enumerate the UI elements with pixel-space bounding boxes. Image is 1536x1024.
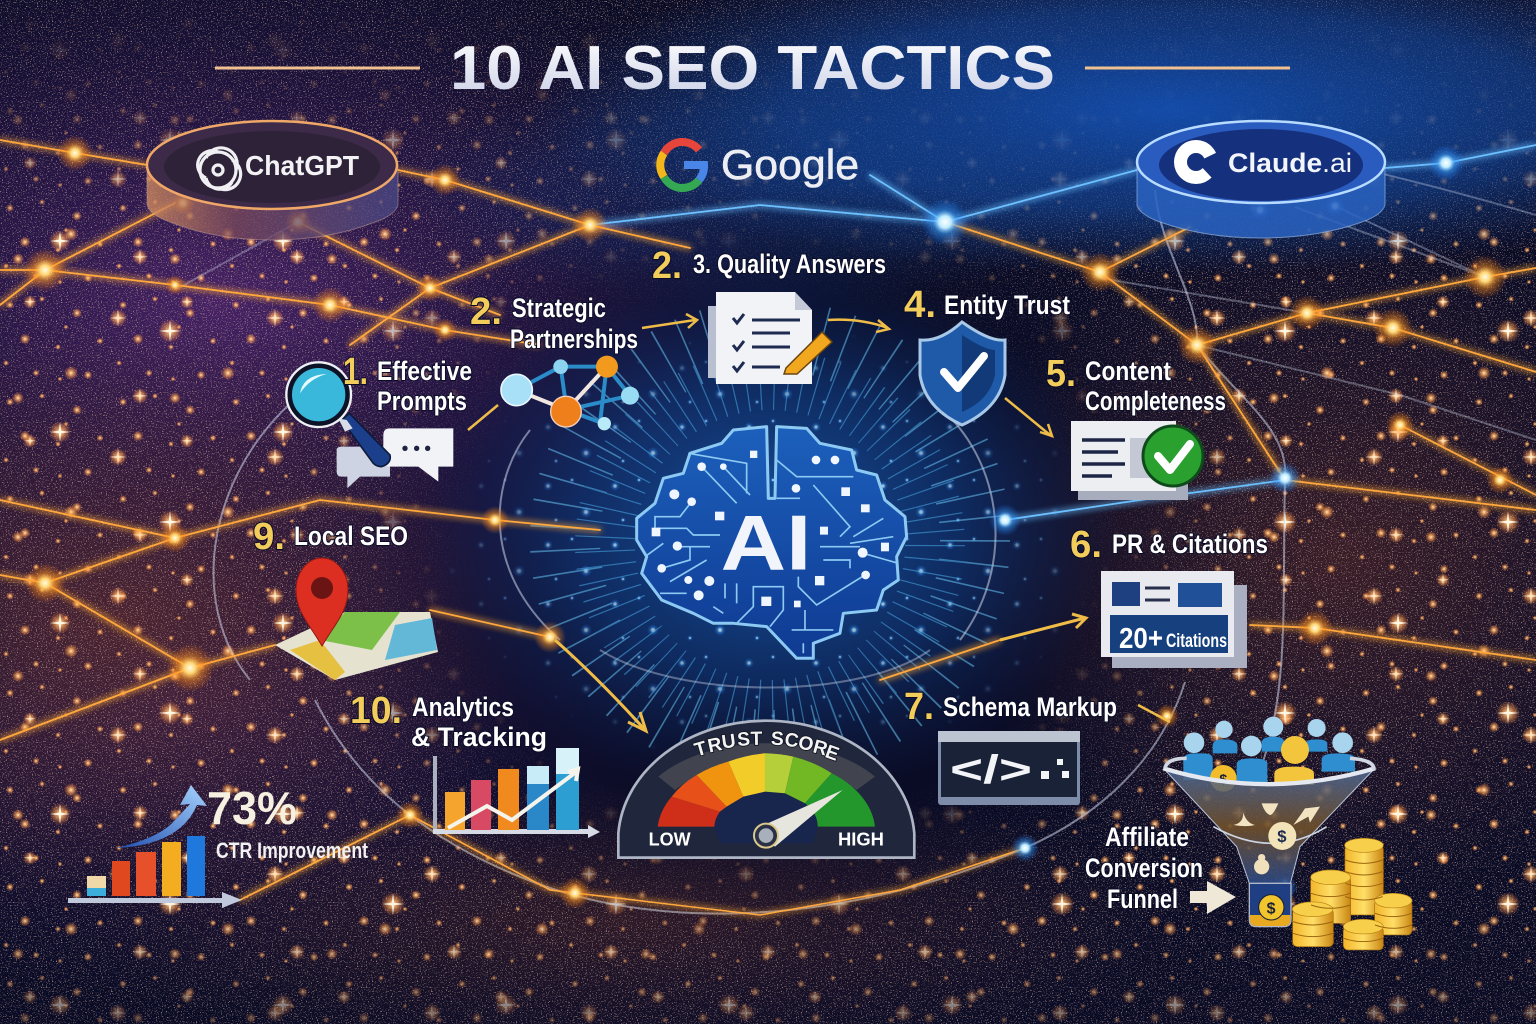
badge: ChatGPT	[147, 121, 398, 240]
tactic 10: Analytics and Tracking: Analytics	[412, 692, 514, 722]
tactic 2: Strategic Partnerships: 2.	[470, 291, 502, 333]
gauge labels: C	[783, 730, 800, 752]
icon: newspaper: 20+	[1119, 623, 1163, 655]
affiliate conversion funnel: Funnel	[1107, 884, 1178, 914]
bar chart and rising arrow	[68, 785, 242, 908]
circuit traces	[645, 453, 898, 653]
tactic 5: Content Completeness: 5.	[1046, 353, 1076, 395]
badge: Google	[660, 141, 859, 188]
badge: ChatGPT: ChatGPT	[245, 150, 359, 181]
affiliate conversion funnel	[1085, 717, 1412, 950]
tactic 9: Local SEO	[253, 516, 438, 680]
title: 10 AI SEO TACTICS	[450, 34, 1055, 103]
icon: map with pin	[275, 558, 438, 680]
stat: 73% CTR improvement: 73%	[207, 782, 297, 834]
gauge labels: S	[737, 729, 751, 751]
label: AI: AI	[721, 498, 811, 586]
affiliate conversion funnel: Conversion	[1085, 853, 1203, 883]
gauge needle	[754, 790, 843, 848]
tactic 3: Quality Answers: 3. Quality Answers	[693, 249, 886, 279]
tactic 2: Strategic Partnerships: Strategic	[512, 293, 606, 323]
tactic 4: Entity Trust: 4.	[904, 284, 936, 326]
badge: Google: Google	[721, 141, 859, 188]
icon: partner network	[501, 356, 639, 430]
tactic 5: Content Completeness	[1046, 353, 1226, 500]
badge: Claude.ai	[1137, 121, 1385, 238]
bar chart	[433, 748, 600, 838]
affiliate conversion funnel: Affiliate	[1105, 822, 1189, 852]
gauge labels: S	[770, 729, 784, 750]
central AI brain	[637, 427, 907, 658]
tactic 6: PR and Citations: PR & Citations	[1112, 529, 1268, 559]
tactic 9: Local SEO: 9.	[253, 516, 285, 558]
tactic 3: Quality Answers: 2.	[652, 245, 682, 287]
stat: 73% CTR improvement	[68, 782, 369, 908]
gauge labels: O	[796, 733, 815, 756]
rays around the brain	[565, 335, 975, 745]
conversion pouch	[1249, 883, 1291, 927]
tactic 10: Analytics and Tracking: 10.	[350, 690, 402, 732]
gauge labels: LOW	[649, 829, 691, 850]
icon: code window	[938, 731, 1080, 805]
tactic 6: PR and Citations	[1070, 524, 1268, 668]
icon: newspaper: Citations	[1166, 631, 1227, 652]
tactic 1: Effective Prompts: Prompts	[377, 386, 467, 416]
tactic 2: Strategic Partnerships: Partnerships	[510, 324, 638, 354]
tactic 4: Entity Trust: Entity Trust	[944, 290, 1070, 320]
badge: Claude.ai: Claude.ai	[1228, 148, 1352, 178]
tactic 4: Entity Trust	[904, 284, 1070, 425]
tactic 10: Analytics and Tracking	[350, 690, 600, 838]
network lines	[0, 140, 1536, 915]
tactic 2: Strategic Partnerships	[470, 291, 639, 430]
tactic 5: Content Completeness: Content	[1085, 356, 1171, 386]
gauge labels: R	[706, 734, 724, 758]
gauge labels: E	[822, 742, 842, 766]
gauge labels	[649, 729, 884, 850]
tactic 7: Schema Markup	[904, 686, 1117, 805]
tactic 1: Effective Prompts	[286, 351, 472, 488]
gauge: trust score	[618, 721, 914, 858]
tactic 9: Local SEO: Local SEO	[294, 521, 408, 551]
arrow to pouch	[1190, 881, 1236, 914]
gauge colour bands	[658, 753, 875, 827]
tactic 3: Quality Answers	[652, 245, 886, 384]
tactic 10: Analytics and Tracking: & Tracking	[411, 722, 547, 752]
icon: newspaper	[1101, 571, 1247, 668]
glowing nodes	[23, 135, 1514, 909]
icon: Google G	[660, 142, 704, 188]
arrows between tactics	[468, 314, 1170, 731]
gauge labels: U	[720, 731, 737, 754]
funnel people: $	[1219, 771, 1227, 787]
tactic 1: Effective Prompts: 1.	[343, 351, 368, 393]
icon: Claude mark	[1174, 140, 1222, 184]
gauge labels: T	[750, 729, 763, 750]
inner dial window	[714, 792, 818, 843]
tactic 1: Effective Prompts: Effective	[377, 356, 472, 386]
tactic 7: Schema Markup: Schema Markup	[943, 692, 1117, 722]
icon: code window: </>	[950, 748, 1032, 792]
tactic 5: Content Completeness: Completeness	[1085, 386, 1226, 416]
icon: shield	[920, 322, 1005, 425]
gauge labels: HIGH	[838, 829, 884, 850]
icon: document with green check	[1071, 421, 1203, 500]
gauge labels: T	[692, 738, 710, 761]
stat: 73% CTR improvement: CTR Improvement	[216, 838, 369, 863]
circuit pads	[652, 451, 889, 607]
funnel body	[1165, 770, 1373, 885]
tactic 7: Schema Markup: 7.	[904, 686, 934, 728]
affiliate conversion funnel: $	[1267, 900, 1276, 917]
funnel people	[1183, 717, 1355, 792]
gauge labels: R	[811, 737, 830, 760]
tactic 6: PR and Citations: 6.	[1070, 524, 1102, 566]
coin stacks	[1293, 845, 1412, 950]
icon: magnifier and chat bubbles	[286, 362, 453, 488]
icon: checklist document	[708, 292, 832, 384]
icon: ChatGPT knot	[198, 148, 241, 190]
thin orbit arcs	[175, 172, 1536, 914]
affiliate conversion funnel: $	[1277, 827, 1287, 846]
